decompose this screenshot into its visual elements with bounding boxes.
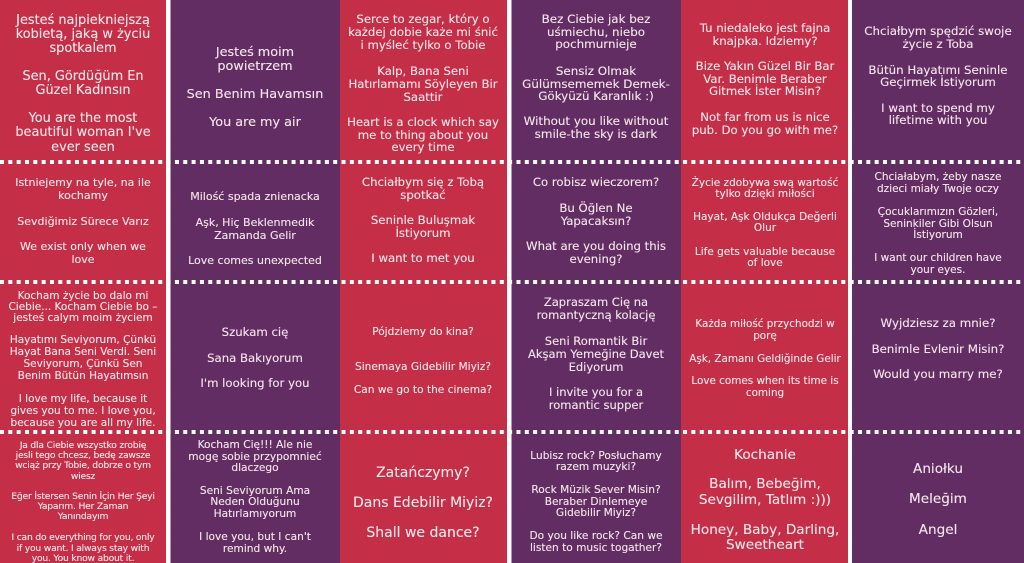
text block: spend my lifetime with you: Bütün Hayatımı Seninle — [868, 63, 1008, 77]
text block: what are you doing this evening: Co robisz wieczorem? — [533, 175, 659, 189]
text block: I can do everything for you: Yaparım. Her Zaman — [37, 501, 129, 512]
text block: I love my life: because you are all my life. — [11, 417, 155, 429]
text block: I love my life: Hayatımı Seviyorum, Çünkü — [10, 334, 156, 346]
panel: column 5 — [681, 0, 848, 563]
text block: nice pub nearby: Tu niedaleko jest fajna — [699, 21, 830, 35]
text block: I'm looking for you: Szukam cię — [222, 325, 288, 339]
text block: I want to meet you: spotkać — [400, 188, 446, 202]
text block: spend my lifetime with you: życie z Toba — [902, 37, 974, 51]
text block: angel — [909, 461, 967, 538]
text block: I can do everything for you: if you want. I always stay with — [17, 543, 150, 554]
text block: nice pub nearby: pub. Do you go with me? — [692, 123, 838, 137]
text block: heart is a clock: me to thing about you — [358, 128, 488, 142]
text block: without you the sky is dark: pochmurnieje — [555, 37, 637, 51]
text block: romantic supper: romantyczną kolację — [537, 308, 655, 322]
text block: nice pub nearby: Not far from us is nice — [700, 110, 830, 124]
text block: heart is a clock: Heart is a clock which say — [347, 115, 499, 129]
text block: would you marry me: Wyjdziesz za mnie? — [881, 316, 995, 330]
text block: you are my air: powietrzem — [217, 59, 293, 74]
text block: life gets valuable because of love: tylko dzięki miłości — [715, 188, 815, 200]
text block: heart is a clock: Serce to zegar, który o — [356, 12, 490, 26]
text block: romantic supper: Akşam Yemeğine Davet — [528, 347, 665, 361]
text block: most beautiful woman: Jesteś najpiekniejszą — [15, 13, 150, 28]
text block: love comes when its time is coming: Aşk, Zamanı Geldiğinde Gelir — [689, 353, 842, 365]
text block: love comes when its time is coming: Love comes when its time is — [691, 375, 839, 387]
text block: love comes unexpected: Milość spada znienacka — [190, 190, 320, 203]
text block: I love my life: gives you to me. I love you, — [10, 405, 156, 417]
text block: would you marry me: Benimle Evlenir Misin? — [872, 342, 1004, 356]
text block: what are you doing this evening: Yapacaksın? — [560, 214, 631, 228]
text block: our children have your eyes: İstiyorum — [913, 228, 963, 241]
text block: romantic supper — [528, 295, 665, 412]
text block: I can do everything for you: Ja dla Ciebie wszystko zrobię — [19, 440, 147, 451]
text block: without you the sky is dark: Without you like without — [524, 114, 669, 128]
text block: life gets valuable because of love: Hayat, Aşk Oldukça Değerli — [693, 211, 837, 223]
panel: column 2 — [170, 0, 340, 563]
text block: love comes unexpected: Love comes unexpected — [188, 254, 322, 267]
text block: what are you doing this evening: evening? — [570, 252, 622, 266]
panel: column 1 — [0, 0, 166, 563]
text block: do you like rock: Do you like rock? Can we — [529, 530, 663, 542]
text block: I love you but can't remind why: Seni Seviyorum Ama — [200, 485, 310, 497]
text block: I love my life: Hayat Bana Seni Verdi. Seni — [10, 346, 156, 358]
text block: most beautiful woman: You are the most — [28, 111, 137, 126]
text block: love comes unexpected: Zamanda Gelir — [214, 229, 296, 242]
text block: nice pub nearby: knajpka. Idziemy? — [712, 34, 818, 48]
text block: I want to meet you: Seninle Buluşmak — [371, 213, 475, 227]
text block: most beautiful woman: beautiful woman I've — [15, 125, 151, 140]
text block: I can do everything for you: Eğer İstersen Senin İçin Her Şeyi — [11, 491, 155, 502]
text block: I love my life: jesteś calym moim życiem — [12, 312, 153, 324]
text block: life gets valuable because of love — [692, 176, 839, 269]
text block: shall we dance: Dans Edebilir Miyiz? — [353, 495, 493, 511]
text block: do you like rock: Beraber Dinlemeye — [545, 496, 647, 508]
text block: love comes when its time is coming: coming — [746, 387, 784, 399]
text block: angel: Aniołku — [913, 461, 963, 477]
text block: we exist only when we love: Istniejemy na tyle, na ile — [15, 176, 151, 189]
text block: spend my lifetime with you: lifetime with you — [889, 113, 987, 127]
text block: spend my lifetime with you — [864, 24, 1012, 127]
text block: would you marry me — [872, 316, 1004, 381]
text block: darling: Honey, Baby, Darling, — [691, 522, 839, 538]
text block: do you like rock: listen to music togather? — [530, 542, 662, 554]
text block: do you like rock — [529, 450, 663, 554]
text block: we exist only when we love: We exist only when we — [20, 240, 146, 253]
text block: our children have your eyes: Chciałabym, żeby nasze — [874, 171, 1002, 183]
text block: you are my air: Jesteś moim — [215, 45, 294, 60]
text block: you are my air — [187, 45, 323, 130]
panel: column 4 — [512, 0, 682, 563]
text block: angel: Angel — [919, 522, 957, 538]
text block: I'm looking for you: I'm looking for you — [200, 376, 310, 390]
text block: I love my life: Benim Bütün Hayatımsın — [18, 370, 148, 382]
text block: our children have your eyes: I want our children have — [874, 252, 1002, 264]
text block: would you marry me: Would you marry me? — [873, 367, 1003, 381]
text block: I can do everything for you: jesli tego chcesz, bedę zawsze — [15, 450, 151, 461]
text block: I can do everything for you: I can do everything for you, only — [11, 532, 155, 543]
text block: heart is a clock: Saattir — [404, 90, 443, 104]
text block: spend my lifetime with you: Chciałbym spędzić swoje — [864, 24, 1012, 38]
text block: I want to meet you: Chciałbym się z Tobą — [362, 175, 484, 189]
text block: cinema: Sinemaya Gidebilir Miyiz? — [355, 361, 491, 373]
text block: darling: Sevgilim, Tatlım :))) — [699, 492, 831, 508]
text block: romantic supper: Ediyorum — [569, 360, 623, 374]
text block: heart is a clock: każdej dobie każe mi śnić — [348, 25, 498, 39]
text block: do you like rock: Lubisz rock? Posłuchamy — [530, 450, 662, 462]
text block: most beautiful woman: kobietą, jaką w życiu — [16, 27, 150, 42]
text block: do you like rock: razem muzyki? — [556, 461, 636, 473]
panel: column 6 — [852, 0, 1024, 563]
text block: you are my air: Sen Benim Havamsın — [187, 87, 323, 102]
text block: do you like rock: Rock Müzik Sever Misin? — [531, 484, 661, 496]
text block: we exist only when we love: kochamy — [58, 189, 108, 202]
text block: without you the sky is dark: Bez Ciebie jak bez — [542, 12, 650, 26]
text block: life gets valuable because of love: Life gets valuable because — [695, 246, 835, 258]
text block: most beautiful woman: spotkalem — [49, 41, 117, 56]
text block: I love you but can't remind why: I love you, but I can't — [199, 531, 311, 543]
text block: I can do everything for you: Yanındayım — [57, 511, 109, 522]
text block: our children have your eyes: dzieci miały Twoje oczy — [877, 183, 999, 195]
text block: darling: Kochanie — [734, 447, 796, 463]
text block: shall we dance — [353, 465, 493, 541]
text block: without you the sky is dark: Sensiz Olmak — [556, 64, 636, 78]
text block: romantic supper: I invite you for a — [549, 385, 643, 399]
text block: darling: Sweetheart — [726, 537, 804, 553]
text block: heart is a clock: every time — [391, 140, 455, 154]
text block: angel: Meleğim — [909, 491, 967, 507]
text block: darling: Balım, Bebeğim, — [709, 476, 821, 492]
text block: do you like rock: Gidebilir Miyiz? — [556, 507, 636, 519]
text block: darling — [691, 447, 839, 553]
text block: love comes when its time is coming: Każda miłość przychodzi w — [695, 318, 835, 330]
text block: most beautiful woman: ever seen — [51, 140, 115, 155]
text block: I love you but can't remind why: Kocham Cię!!! Ale nie — [198, 439, 312, 451]
text block: love comes when its time is coming — [689, 318, 842, 399]
panel: column 3 — [340, 0, 507, 563]
text block: love comes unexpected — [188, 190, 322, 267]
text block: life gets valuable because of love: Życie zdobywa swą wartość — [692, 176, 839, 189]
text block: I love my life — [8, 290, 158, 429]
text block: without you the sky is dark — [522, 12, 670, 141]
text block: romantic supper: romantic supper — [549, 398, 643, 412]
text block: we exist only when we love: Sevdiğimiz Sürece Varız — [17, 215, 149, 228]
text block: cinema: Pójdziemy do kina? — [372, 326, 474, 338]
text block: heart is a clock: Hatırlamamı Söyleyen Bir — [348, 77, 498, 91]
text block: I love you but can't remind why: dlaczego — [231, 462, 279, 474]
text block: cinema: Can we go to the cinema? — [354, 384, 492, 396]
text block: our children have your eyes: your eyes. — [911, 264, 965, 276]
text block: life gets valuable because of love: Olur — [754, 222, 777, 234]
text block: love comes when its time is coming: porę — [753, 330, 777, 342]
text block: I want to meet you: I want to met you — [371, 251, 475, 265]
text block: life gets valuable because of love: of love — [747, 257, 783, 269]
text block: most beautiful woman: Güzel Kadınsın — [35, 83, 131, 98]
text block: I love you but can't remind why: Hatırlamıyorum — [214, 508, 296, 520]
text block: spend my lifetime with you: Geçirmek İstiyorum — [880, 74, 996, 89]
text block: we exist only when we love: love — [71, 253, 95, 266]
text block: heart is a clock: i myśleć tylko o Tobie — [361, 38, 485, 52]
text block: I love you but can't remind why — [188, 439, 322, 555]
text block: love comes unexpected: Aşk, Hiç Beklenmedik — [196, 216, 315, 229]
text block: I can do everything for you — [11, 440, 155, 563]
text block: you are my air: You are my air — [208, 115, 302, 130]
text block: I'm looking for you — [200, 325, 310, 390]
text block: I love you but can't remind why: Neden Olduğunu — [210, 496, 300, 508]
text block: cinema — [354, 326, 492, 396]
text block: heart is a clock — [347, 12, 499, 154]
text block: what are you doing this evening: What are you doing this — [526, 239, 666, 253]
text block: our children have your eyes — [874, 171, 1002, 276]
text block: what are you doing this evening — [526, 175, 666, 266]
text block: heart is a clock: Kalp, Bana Seni — [377, 64, 469, 78]
text block: I love my life: I love my life, because it — [19, 393, 147, 405]
text block: I love you but can't remind why: remind why. — [223, 543, 287, 555]
text block: shall we dance: Zatańczymy? — [376, 465, 470, 481]
text block: I love my life: Seviyorum, Çünkü Sen — [24, 358, 142, 370]
text block: I want to meet you: İstiyorum — [395, 225, 451, 240]
text block: our children have your eyes: Çocuklarımızın Gözleri, — [878, 206, 998, 218]
text block: we exist only when we love — [15, 176, 151, 266]
text block: I'm looking for you: Sana Bakıyorum — [207, 351, 303, 365]
text block: most beautiful woman: Sen, Gördüğüm En — [22, 69, 144, 84]
text block: most beautiful woman — [15, 13, 151, 155]
text block: our children have your eyes: Seninkiler Gibi Olsun — [883, 218, 993, 230]
text block: without you the sky is dark: smile-the sky is dark — [535, 127, 657, 141]
text block: spend my lifetime with you: I want to spend my — [881, 101, 995, 115]
text block: I want to meet you — [362, 175, 484, 265]
text block: nice pub nearby — [692, 21, 838, 137]
text block: without you the sky is dark: uśmiechu, niebo — [547, 25, 645, 39]
text block: romantic supper: Zapraszam Cię na — [544, 295, 648, 309]
text block: I love my life: Kocham życie bo dalo mi — [18, 290, 148, 302]
text block: nice pub nearby: Var. Benimle Beraber — [703, 72, 827, 86]
text block: I can do everything for you: wiesz — [71, 471, 96, 482]
text block: without you the sky is dark: Gökyüzü Karanlık :) — [538, 89, 654, 103]
text block: nice pub nearby: Bize Yakın Güzel Bir Bar — [696, 59, 835, 73]
text block: without you the sky is dark: Gülümsememek Demek- — [522, 77, 670, 91]
text block: shall we dance: Shall we dance? — [366, 525, 480, 541]
text block: I can do everything for you: wciąż przy Tobie, dobrze o tym — [15, 460, 151, 471]
text block: romantic supper: Seni Romantik Bir — [545, 334, 647, 348]
text block: nice pub nearby: Gitmek İster Misin? — [709, 83, 821, 98]
text block: I love you but can't remind why: mogę sobie przypomnieć — [188, 451, 322, 463]
text block: I love my life: Ciebie... Kocham Ciebie bo – — [8, 301, 158, 313]
text block: what are you doing this evening: Bu Öğlen Ne — [559, 199, 633, 215]
